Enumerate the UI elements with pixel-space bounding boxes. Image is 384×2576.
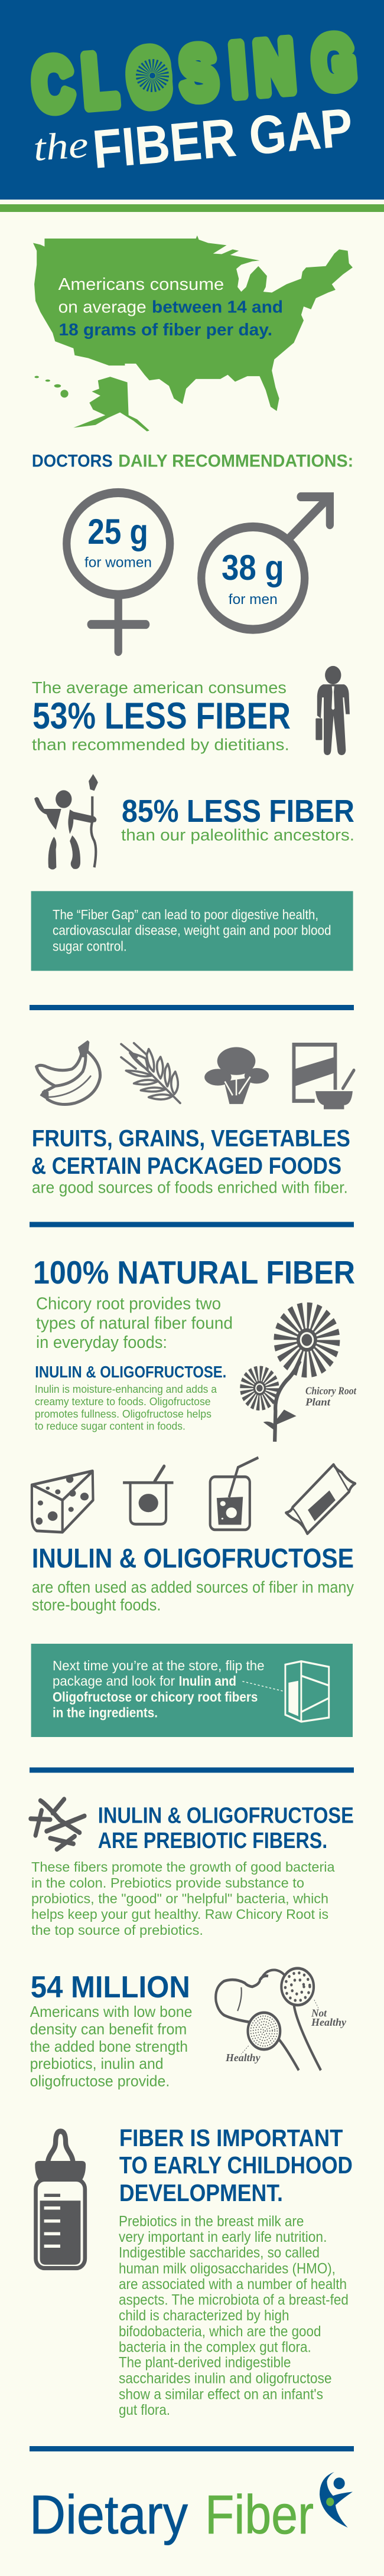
icon: baby bottle (35, 2131, 86, 2268)
heading: early childhood development: TO EARLY CHILDHOOD (119, 2151, 353, 2179)
logo: Dietary Fiber: Fiber (205, 2484, 314, 2545)
heading: prebiotic fibers (98, 1803, 354, 1853)
callout: next time at the store (31, 1644, 353, 1737)
icon: chicory root plant (248, 1316, 357, 1442)
icon: male symbol with 38 g (201, 497, 330, 629)
icon: drink with straw (210, 1458, 258, 1530)
heading: fruits grains vegetables (31, 1126, 350, 1196)
logo: Dietary Fiber (30, 2472, 353, 2545)
logo: Dietary Fiber: Dietary (30, 2484, 188, 2545)
callout: the fiber gap (31, 891, 353, 971)
text: early childhood description: aspects. The microbiota of a breast-fed (119, 2292, 349, 2309)
stat: 53% less fiber (32, 678, 291, 753)
heading: doctors daily recommendations: DOCTORS (32, 451, 113, 471)
icon: broccoli (204, 1047, 269, 1104)
callout: the fiber gap: sugar control. (53, 938, 127, 954)
text: inulin and oligofructose description: INULIN & OLIGOFRUCTOSE. (35, 1363, 226, 1381)
icon: female symbol with 25 g (67, 492, 170, 651)
heading: fruits grains vegetables: FRUITS, GRAINS, VEGETABLES (32, 1126, 350, 1152)
heading: 100% natural fiber: 100% NATURAL FIBER (33, 1254, 355, 1291)
stat: 85% less fiber: 85% LESS FIBER (122, 794, 354, 829)
text: prebiotic description: probiotics, the "good" or "helpful" bacteria, which (31, 1891, 328, 1906)
stat: 54 million: 54 MILLION (31, 1970, 190, 2004)
callout: the fiber gap: cardiovascular disease, weight gain and poor blood (53, 922, 331, 938)
stat: 54 million: density can benefit from (30, 2020, 187, 2038)
heading: early childhood development (119, 2124, 353, 2206)
text: prebiotic description (31, 1859, 335, 1938)
text: early childhood description: Prebiotics in the breast milk are (119, 2213, 304, 2230)
stat: 85% less fiber (121, 794, 354, 844)
icon: yogurt cup (123, 1466, 173, 1524)
stat: 54 million: oligofructose provide. (30, 2072, 170, 2089)
text: prebiotic description: the top source of prebiotics. (31, 1922, 203, 1938)
stat: 53% less fiber: 53% LESS FIBER (32, 696, 291, 737)
heading: doctors daily recommendations: DAILY RECOMMENDATIONS: (118, 451, 353, 471)
icon: bananas (37, 1041, 100, 1105)
text: early childhood description: gut flora. (119, 2402, 170, 2418)
title: Closing: CLOSING (30, 20, 359, 127)
map of the United States (33, 236, 353, 432)
stat: 54 million: Americans with low bone (30, 2003, 192, 2020)
map caption (58, 275, 283, 339)
map caption: between 14 and (152, 298, 283, 316)
callout: next time at the store: in the ingredients. (53, 1705, 158, 1720)
icon: logo figure (320, 2472, 353, 2528)
icon: bone density illustration: Healthy (311, 2016, 347, 2028)
text: early childhood description: bifodobacteria, which are the good (119, 2323, 321, 2340)
callout: the fiber gap: The “Fiber Gap” can lead to poor digestive health, (53, 907, 318, 922)
callout: next time at the store: Oligofructose or chicory root fibers (53, 1689, 258, 1705)
text: early childhood description (119, 2213, 349, 2418)
icon: male symbol with 38 g: for men (229, 592, 278, 608)
text: inulin and oligofructose description: creamy texture to foods. Oligofructose (35, 1396, 211, 1408)
icon: package with dashed pointer (242, 1661, 329, 1722)
stat: 54 million: the added bone strength (30, 2038, 188, 2055)
heading: inulin and oligofructose sources: INULIN & OLIGOFRUCTOSE (32, 1543, 354, 1573)
heading: inulin and oligofructose sources: are often used as added sources of fiber in many (32, 1578, 354, 1596)
icon: chicory root plant: Chicory Root (305, 1385, 357, 1397)
stat: 85% less fiber: than our paleolithic ancestors. (121, 825, 354, 844)
heading: inulin and oligofructose sources: store-bought foods. (32, 1595, 161, 1614)
heading: fruits grains vegetables: are good sources of foods enriched with fiber. (32, 1178, 348, 1196)
text: chicory root intro: types of natural fiber found (36, 1314, 233, 1333)
callout: next time at the store: Next time you’re at the store, flip the (53, 1658, 265, 1673)
text: early childhood description: bacteria in the complex gut flora. (119, 2339, 311, 2355)
stat: 53% less fiber: The average american consumes (32, 678, 287, 697)
text: inulin and oligofructose description: promotes fullness. Oligofructose helps (35, 1408, 211, 1420)
text: early childhood description: are associated with a number of health (119, 2276, 347, 2293)
stat: 53% less fiber: than recommended by dietitians. (32, 736, 289, 753)
heading: inulin and oligofructose sources (32, 1543, 354, 1614)
callout: next time at the store: Inulin and (179, 1673, 236, 1689)
text: chicory root intro: Chicory root provides two (36, 1295, 221, 1314)
icon: cheese (32, 1471, 93, 1532)
icon: bone density illustration: Healthy (225, 2052, 261, 2064)
icon: cereal box and bowl (294, 1044, 354, 1109)
text: early childhood description: Indigestible saccharides, so called (119, 2245, 320, 2261)
stat: 54 million (30, 1970, 192, 2089)
text: early childhood description: very important in early life nutrition. (119, 2229, 327, 2245)
text: inulin and oligofructose description: to reduce sugar content in foods. (35, 1421, 186, 1432)
text: early childhood description: saccharides inulin and oligofructose (119, 2371, 332, 2387)
icon: male symbol with 38 g: 38 g (222, 548, 284, 587)
title: the: the (32, 123, 90, 169)
stat: 54 million: prebiotics, inulin and (30, 2055, 164, 2072)
icon: wheat (121, 1043, 180, 1103)
text: chicory root intro (36, 1295, 233, 1352)
text: early childhood description: human milk oligosaccharides (HMO), (119, 2260, 336, 2277)
map caption: on average (58, 298, 147, 316)
text: prebiotic description: in the colon. Prebiotics provide substance to (31, 1875, 304, 1891)
heading: early childhood development: FIBER IS IMPORTANT (119, 2124, 343, 2151)
icon: bacteria (31, 1799, 84, 1849)
icon: businessman (315, 666, 350, 755)
heading: early childhood development: DEVELOPMENT. (119, 2179, 283, 2206)
title: Fiber Gap: FIBER GAP (90, 97, 355, 180)
map caption: Americans consume (58, 275, 224, 294)
text: inulin and oligofructose description: Inulin is moisture-enhancing and adds a (35, 1383, 217, 1395)
text: prebiotic description: helps keep your gut healthy. Raw Chicory Root is (31, 1906, 328, 1922)
text: early childhood description: child is characterized by high (119, 2307, 289, 2324)
text: prebiotic description: These fibers promote the growth of good bacteria (31, 1859, 335, 1875)
text: inulin and oligofructose description (35, 1363, 226, 1432)
icon: chicory root plant: Plant (305, 1396, 331, 1408)
text: chicory root intro: in everyday foods: (36, 1333, 167, 1352)
icon: female symbol with 25 g: for women (84, 554, 152, 570)
icon: snack bar (286, 1465, 355, 1534)
icon: female symbol with 25 g: 25 g (87, 512, 148, 551)
icon: bone density illustration (216, 1968, 347, 2071)
icon: caveman with spear (34, 774, 98, 870)
callout: next time at the store: package and look for (53, 1673, 175, 1689)
heading: fruits grains vegetables: & CERTAIN PACKAGED FOODS (31, 1153, 341, 1179)
map caption: 18 grams of fiber per day. (59, 321, 272, 339)
text: early childhood description: show a similar effect on an infant's (119, 2386, 323, 2403)
icon: bone density illustration: Not (311, 2007, 327, 2019)
heading: prebiotic fibers: ARE PREBIOTIC FIBERS. (98, 1829, 327, 1853)
header banner (0, 0, 384, 212)
text: early childhood description: The plant-derived indigestible (119, 2355, 291, 2371)
